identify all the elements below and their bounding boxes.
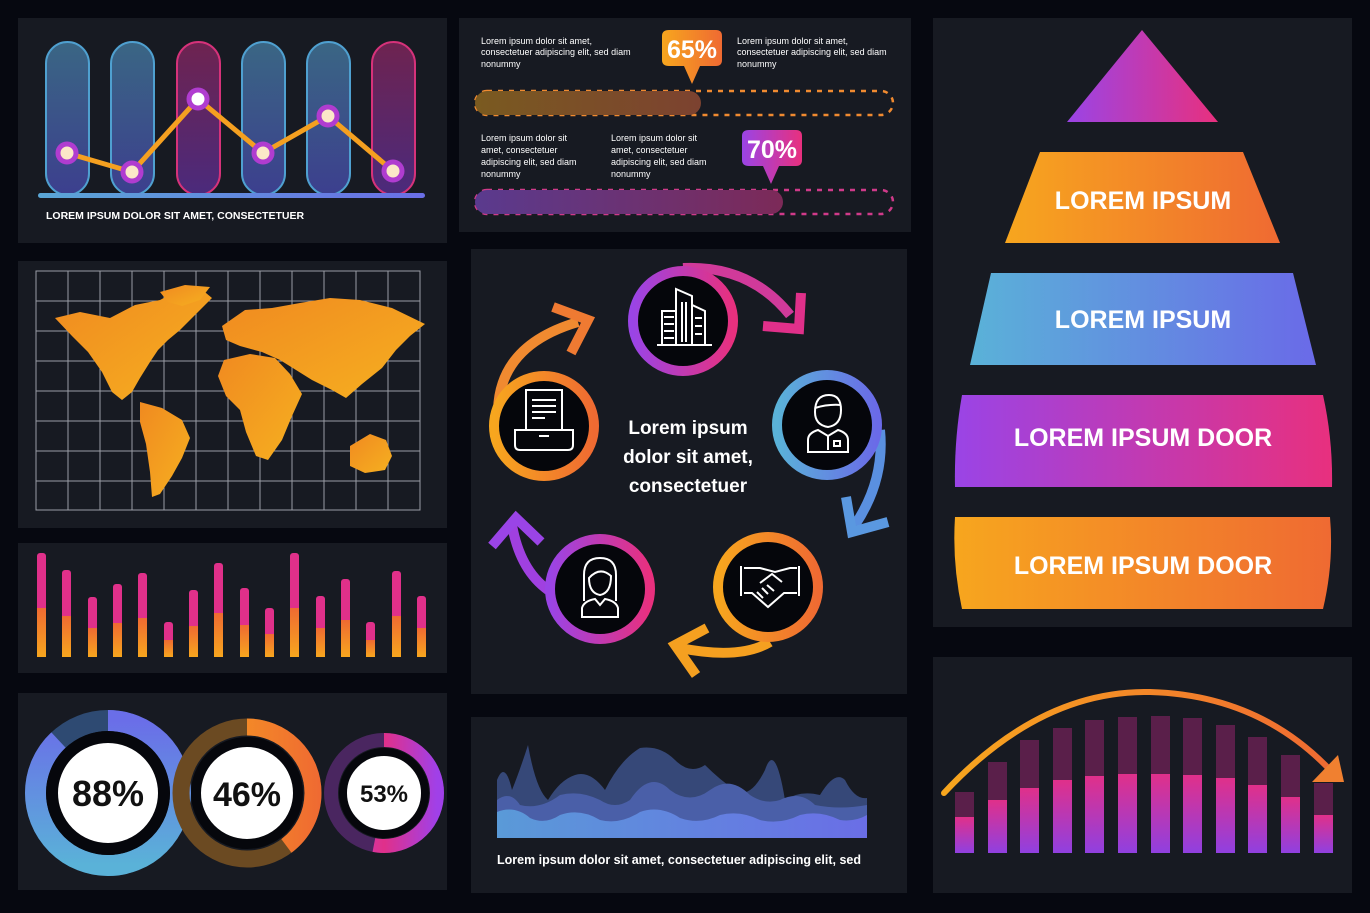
panel: progress bars: consectetuer adipiscing elit, sed diam	[737, 47, 887, 57]
center text: consectetuer	[629, 476, 748, 497]
panel: progress bars: Lorem ipsum dolor sit amet,	[737, 36, 848, 46]
panel: line chart with capsule bars: LOREM IPSUM DOLOR SIT AMET, CONSECTETUER	[46, 210, 304, 222]
panel: world map	[18, 261, 447, 528]
panel: line chart with capsule bars	[18, 18, 447, 243]
panel: progress bars: Lorem ipsum dolor sit amet,	[481, 36, 592, 46]
progress bar 70%	[475, 130, 893, 214]
donut 88%: 88%	[72, 773, 144, 814]
panel: progress bars	[459, 18, 911, 232]
tier 1: LOREM IPSUM	[1055, 187, 1231, 215]
panel: arc bar chart	[933, 657, 1352, 893]
panel: area chart	[471, 717, 907, 893]
center text	[623, 418, 753, 497]
donut 53%	[331, 740, 437, 846]
donut 88%	[36, 720, 180, 866]
panel: stacked bar chart	[18, 543, 447, 673]
panel: progress bars: nonummy	[481, 169, 521, 179]
tier 2: LOREM IPSUM	[1055, 306, 1231, 334]
tier 1	[1005, 152, 1280, 243]
tier 3	[955, 395, 1332, 487]
panel: progress bars: adipiscing elit, sed diam	[481, 157, 577, 167]
tier 3: LOREM IPSUM DOOR	[1014, 424, 1272, 452]
panel: area chart: Lorem ipsum dolor sit amet, consectetuer adipiscing elit, sed	[497, 853, 861, 867]
panel: progress bars: Lorem ipsum dolor sit	[481, 133, 568, 143]
panel: process cycle	[471, 249, 907, 694]
panel: progress bars: nonummy	[481, 59, 521, 69]
step: building	[633, 271, 733, 371]
center text: dolor sit amet,	[623, 447, 753, 468]
panel: progress bars: adipiscing elit, sed diam	[611, 157, 707, 167]
tier 4	[954, 517, 1331, 609]
panel: pyramid	[933, 18, 1352, 627]
progress bar 65%: 65%	[667, 36, 717, 64]
donut 53%: 53%	[360, 781, 408, 808]
progress bar 70%: 70%	[747, 136, 797, 164]
step: businessman	[777, 375, 877, 475]
panel: progress bars: Lorem ipsum dolor sit	[611, 133, 698, 143]
panel: donut charts	[18, 693, 447, 890]
arrow tails	[492, 268, 888, 675]
step: handshake	[718, 537, 818, 637]
donut 46%: 46%	[213, 776, 281, 814]
panel: progress bars: nonummy	[611, 169, 651, 179]
panel: progress bars: nonummy	[737, 59, 777, 69]
progress bar 65%	[475, 30, 893, 115]
tier 4: LOREM IPSUM DOOR	[1014, 552, 1272, 580]
center text: Lorem ipsum	[628, 418, 748, 439]
step: documents	[494, 376, 594, 476]
donut 46%	[181, 727, 313, 859]
step: woman	[550, 539, 650, 639]
tier 2	[970, 273, 1316, 365]
panel: progress bars: amet, consectetuer	[481, 145, 558, 155]
panel: progress bars: amet, consectetuer	[611, 145, 688, 155]
panel: progress bars: consectetuer adipiscing elit, sed diam	[481, 47, 631, 57]
